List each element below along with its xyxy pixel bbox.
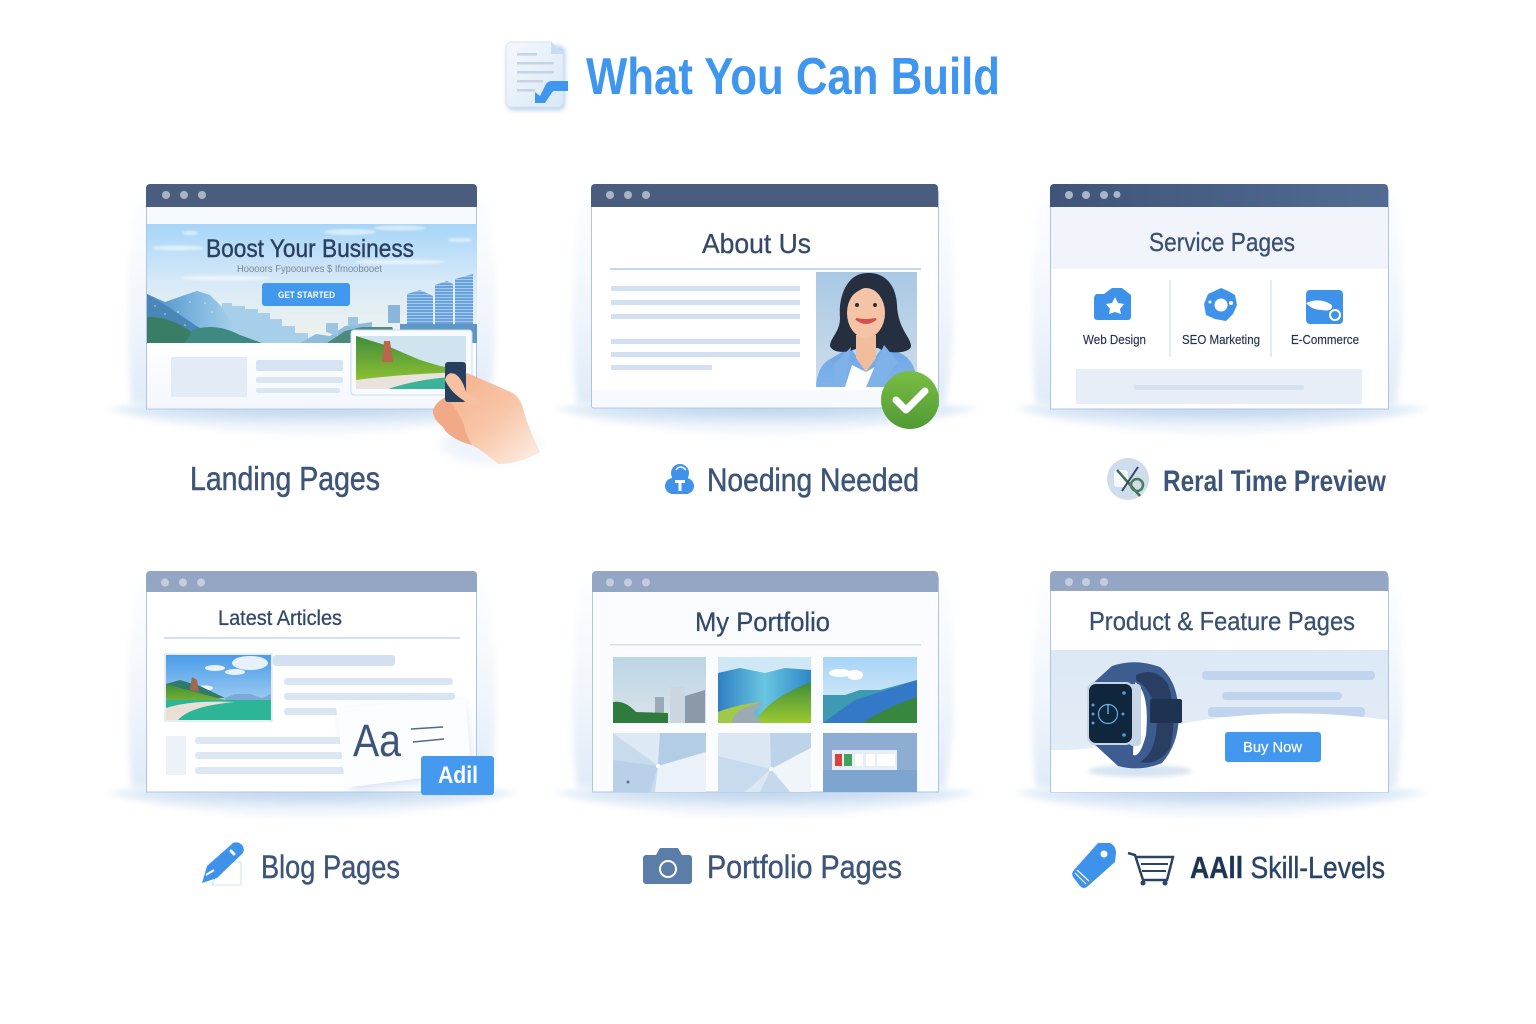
icon: crossed magnifier [1107,458,1149,500]
label: noeding needed: Noeding Needed [707,462,919,498]
label with magnifier icon [1107,458,1387,500]
button: buy now [1225,732,1321,762]
panel: landing pages [105,184,540,497]
label: portfolio pages: Portfolio Pages [707,849,902,885]
divider and text lines [610,268,921,370]
service: seo marketing [1182,288,1260,347]
icon: pencil on note [202,842,244,885]
heading: My Portfolio [695,607,830,637]
thumbnail card [351,330,472,395]
panel: blog [105,571,520,885]
photo: blue mountains [823,657,917,723]
service: web design [1083,288,1146,347]
browser window [591,184,938,408]
label: all skill levels: AAll Skill-Levels [1190,850,1385,885]
heading: About Us [702,228,811,259]
floating type card: Aa [353,715,402,766]
window backdrop glow [552,577,980,817]
icon: shop badge [1306,290,1343,324]
button: get started [262,283,350,306]
icon: camera [643,848,692,884]
browser window [146,184,477,409]
icon: seo blob [1204,288,1237,321]
floating type card [336,699,475,792]
badge: adil [421,756,494,795]
portrait photo [816,272,917,387]
placeholder tile 2 [718,733,811,792]
header: title with document icon [506,42,1000,110]
label: blog pages: Blog Pages [261,849,400,885]
window backdrop glow [105,190,520,434]
placeholder tile 3 [823,733,917,792]
watch product [1087,662,1192,777]
browser window [1050,571,1388,792]
service: e-commerce [1291,290,1359,347]
window backdrop glow [1012,577,1430,817]
label with camera icon [643,848,902,885]
label with pencil icon [202,842,400,885]
heading: Product & Feature Pages [1089,606,1355,636]
browser window [592,571,938,792]
placeholder tile 1 [613,733,706,792]
button: buy now: Buy Now [1243,739,1302,756]
panel: product and feature [1012,571,1430,888]
panel: service pages [1012,184,1430,500]
button: get started: GET STARTED [278,290,335,301]
panel: about us [552,184,980,498]
heading: Service Pages [1149,227,1295,257]
heading: Latest Articles [218,607,342,630]
icon: document with check [506,42,568,110]
title: What You Can Build [586,48,1000,106]
icon: camera folder [1094,288,1131,320]
hero image: sky, mountains, city [147,224,477,343]
service: e-commerce: E-Commerce [1291,333,1359,347]
icon: shopping cart [1128,853,1173,886]
window backdrop glow [1012,190,1430,434]
label: landing pages: Landing Pages [190,460,380,497]
blog photo [165,654,272,721]
hero heading: Boost Your Business [206,235,414,263]
label: real time preview: Reral Time Preview [1163,465,1387,498]
service: web design: Web Design [1083,333,1146,347]
hand holding thumbnail [433,362,540,464]
label with tag and cart icons [1072,843,1385,888]
panel: portfolio [552,571,980,885]
icon: green check badge [881,371,939,429]
icon: price tag [1072,843,1116,888]
browser window [146,571,477,792]
badge: adil: Adil [438,762,478,789]
footer placeholder [1076,369,1362,404]
service: seo marketing: SEO Marketing [1182,333,1260,347]
photo: city [613,657,706,723]
window backdrop glow [552,190,980,434]
hero subtext: Hoooors Fypoourves $ Ifmoobooet [237,263,382,275]
window backdrop glow [105,577,520,817]
content placeholders [171,357,343,397]
gallery grid [613,657,917,792]
hero band with bars [1051,650,1388,792]
label with lock cloud icon [665,462,919,498]
photo: valley road [718,657,811,723]
text placeholders [164,637,460,775]
icon: cloud lock [665,464,694,494]
browser window [1050,184,1388,409]
